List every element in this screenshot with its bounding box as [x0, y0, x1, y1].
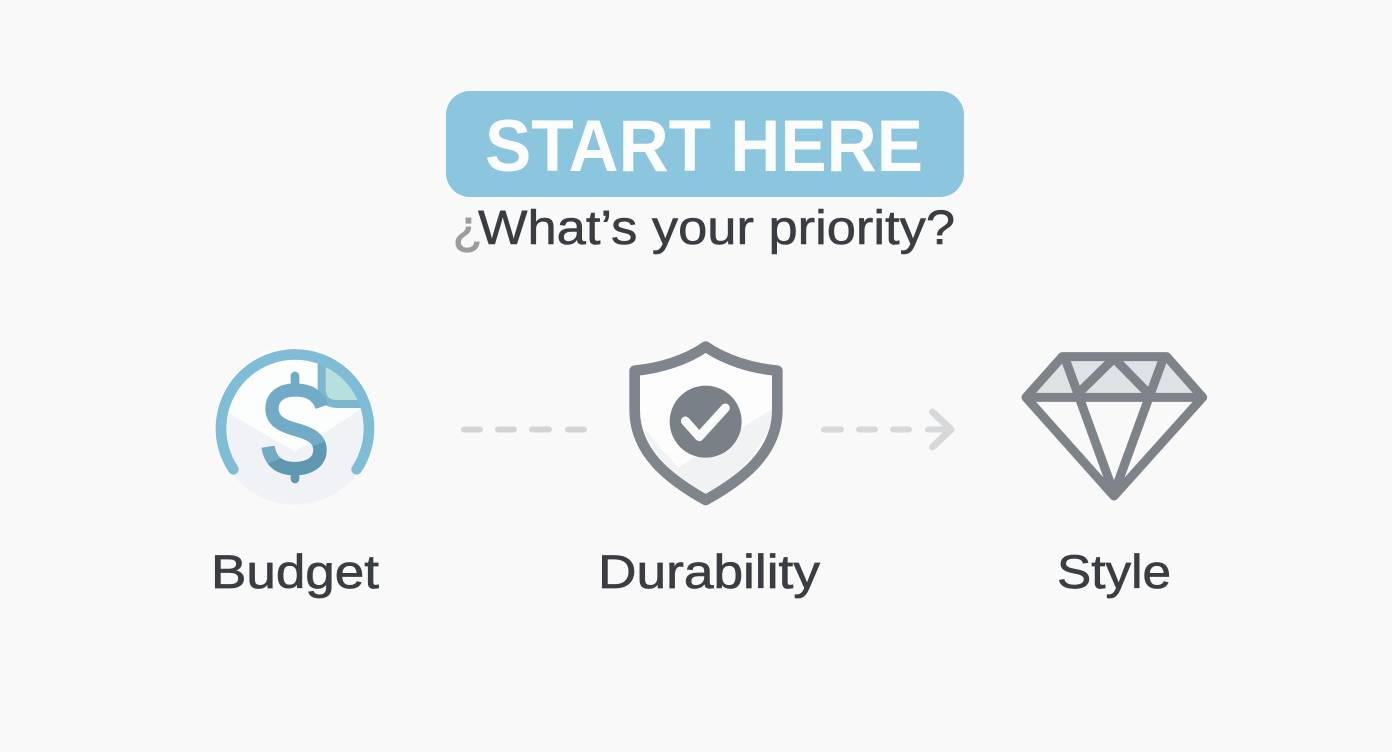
label: durability: Durability: [598, 545, 821, 598]
start here banner: START HERE: [485, 106, 923, 187]
dashed arrow: [824, 412, 951, 447]
subtitle question: ¿: [453, 202, 482, 255]
icon: style diamond: [1026, 357, 1203, 496]
dashed connector: [464, 426, 584, 432]
icon: durability shield: [635, 347, 777, 500]
label: budget: Budget: [211, 545, 379, 598]
icon: budget dollar: [213, 347, 377, 507]
label: style: Style: [1057, 545, 1171, 598]
subtitle question: What’s your priority?: [478, 202, 955, 255]
start here banner: [446, 91, 964, 197]
